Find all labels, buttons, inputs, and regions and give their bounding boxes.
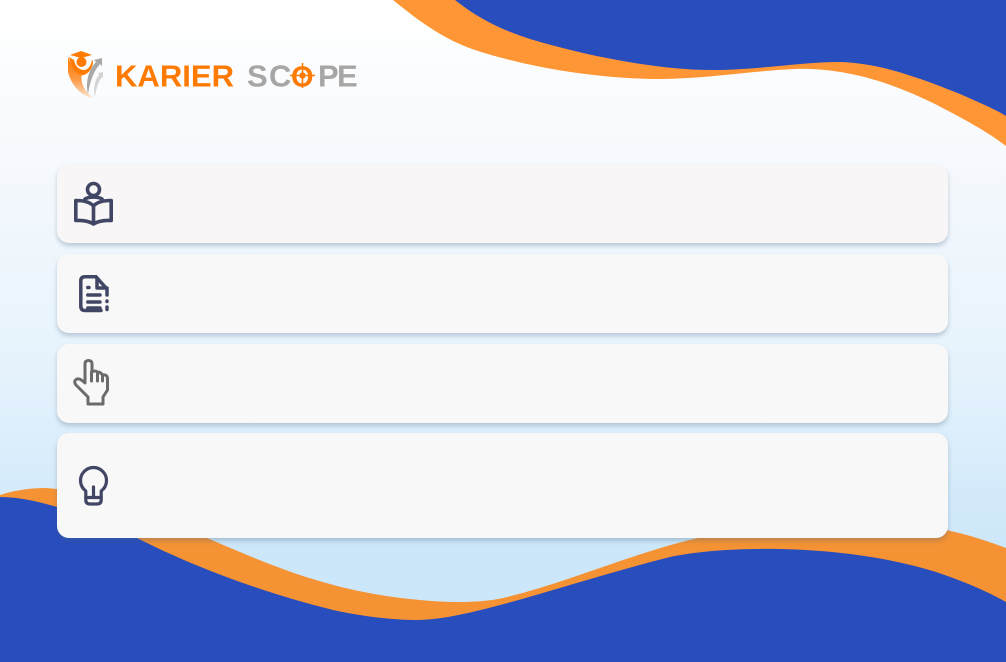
logo target in the letter O [290,63,315,88]
logo icon: graduate with arrows [68,51,103,98]
logo wordmark: SCOPE: PE [318,58,358,94]
panel: row 3 [57,344,948,423]
logo wordmark: SCOPE: O [291,62,314,94]
logo wordmark: SCOPE: SC [247,58,291,94]
panel: row 2 [57,254,948,333]
logo wordmark: KARIER: KARIER [115,58,234,94]
panel: row 1 [57,165,948,243]
panel: row 4 [57,433,948,538]
